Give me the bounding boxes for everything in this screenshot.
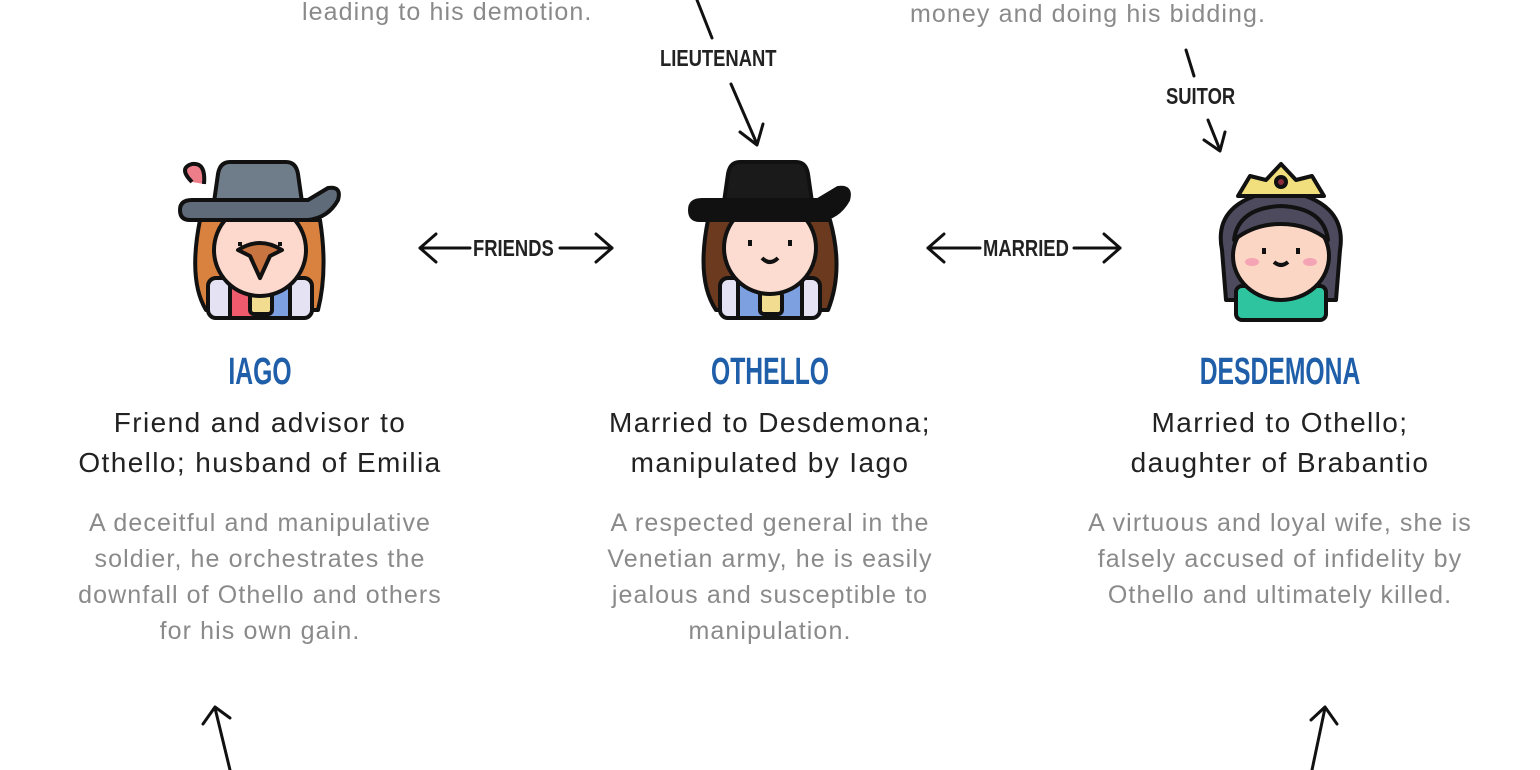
heading: Iago: IAGO	[228, 351, 292, 393]
description: Othello	[607, 509, 933, 645]
description: Iago: for his own gain.	[160, 617, 360, 645]
label: friends: FRIENDS	[473, 235, 554, 261]
description: Iago: soldier, he orchestrates the	[94, 545, 425, 573]
subtitle: Iago: Othello; husband of Emilia	[78, 447, 442, 478]
description: Iago: downfall of Othello and others	[78, 581, 442, 609]
arrow: bottom right	[1311, 707, 1337, 770]
description: Iago: A deceitful and manipulative	[89, 509, 431, 537]
subtitle: Desdemona: Married to Othello;	[1152, 407, 1408, 438]
icon: Desdemona	[1218, 162, 1343, 322]
description: Iago	[78, 509, 442, 645]
top text: Roderigo description: money and doing his bidding.	[910, 0, 1266, 28]
subtitle: Iago	[78, 407, 442, 478]
icon: Iago	[178, 160, 341, 320]
arrow: married	[928, 234, 1120, 262]
arrow: bottom left	[203, 707, 230, 770]
subtitle: Iago: Friend and advisor to	[114, 407, 406, 438]
subtitle: Othello: Married to Desdemona;	[609, 407, 931, 438]
description: Othello: manipulation.	[688, 617, 852, 645]
arrow: lieutenant	[697, 0, 763, 145]
panel: Iago	[78, 351, 442, 645]
description: Othello: A respected general in the	[610, 509, 930, 537]
label: married: MARRIED	[983, 235, 1069, 261]
description: Desdemona: falsely accused of infidelity by	[1098, 545, 1462, 573]
heading: Othello: OTHELLO	[711, 351, 829, 393]
icon: Othello	[688, 160, 851, 320]
arrow: suitor	[1186, 50, 1225, 151]
heading: Desdemona: DESDEMONA	[1200, 351, 1360, 393]
arrow: friends	[420, 234, 612, 262]
panel: Othello	[607, 351, 933, 645]
subtitle: Desdemona: daughter of Brabantio	[1131, 447, 1429, 478]
label: suitor: SUITOR	[1166, 83, 1235, 109]
label: lieutenant: LIEUTENANT	[660, 45, 777, 71]
description: Desdemona: A virtuous and loyal wife, she is	[1088, 509, 1472, 537]
description: Desdemona: Othello and ultimately killed.	[1108, 581, 1452, 609]
panel: Desdemona	[1088, 351, 1472, 609]
description: Othello: jealous and susceptible to	[612, 581, 928, 609]
subtitle: Desdemona	[1131, 407, 1429, 478]
subtitle: Othello: manipulated by Iago	[631, 447, 909, 478]
description: Othello: Venetian army, he is easily	[607, 545, 933, 573]
subtitle: Othello	[609, 407, 931, 478]
description: Desdemona	[1088, 509, 1472, 609]
